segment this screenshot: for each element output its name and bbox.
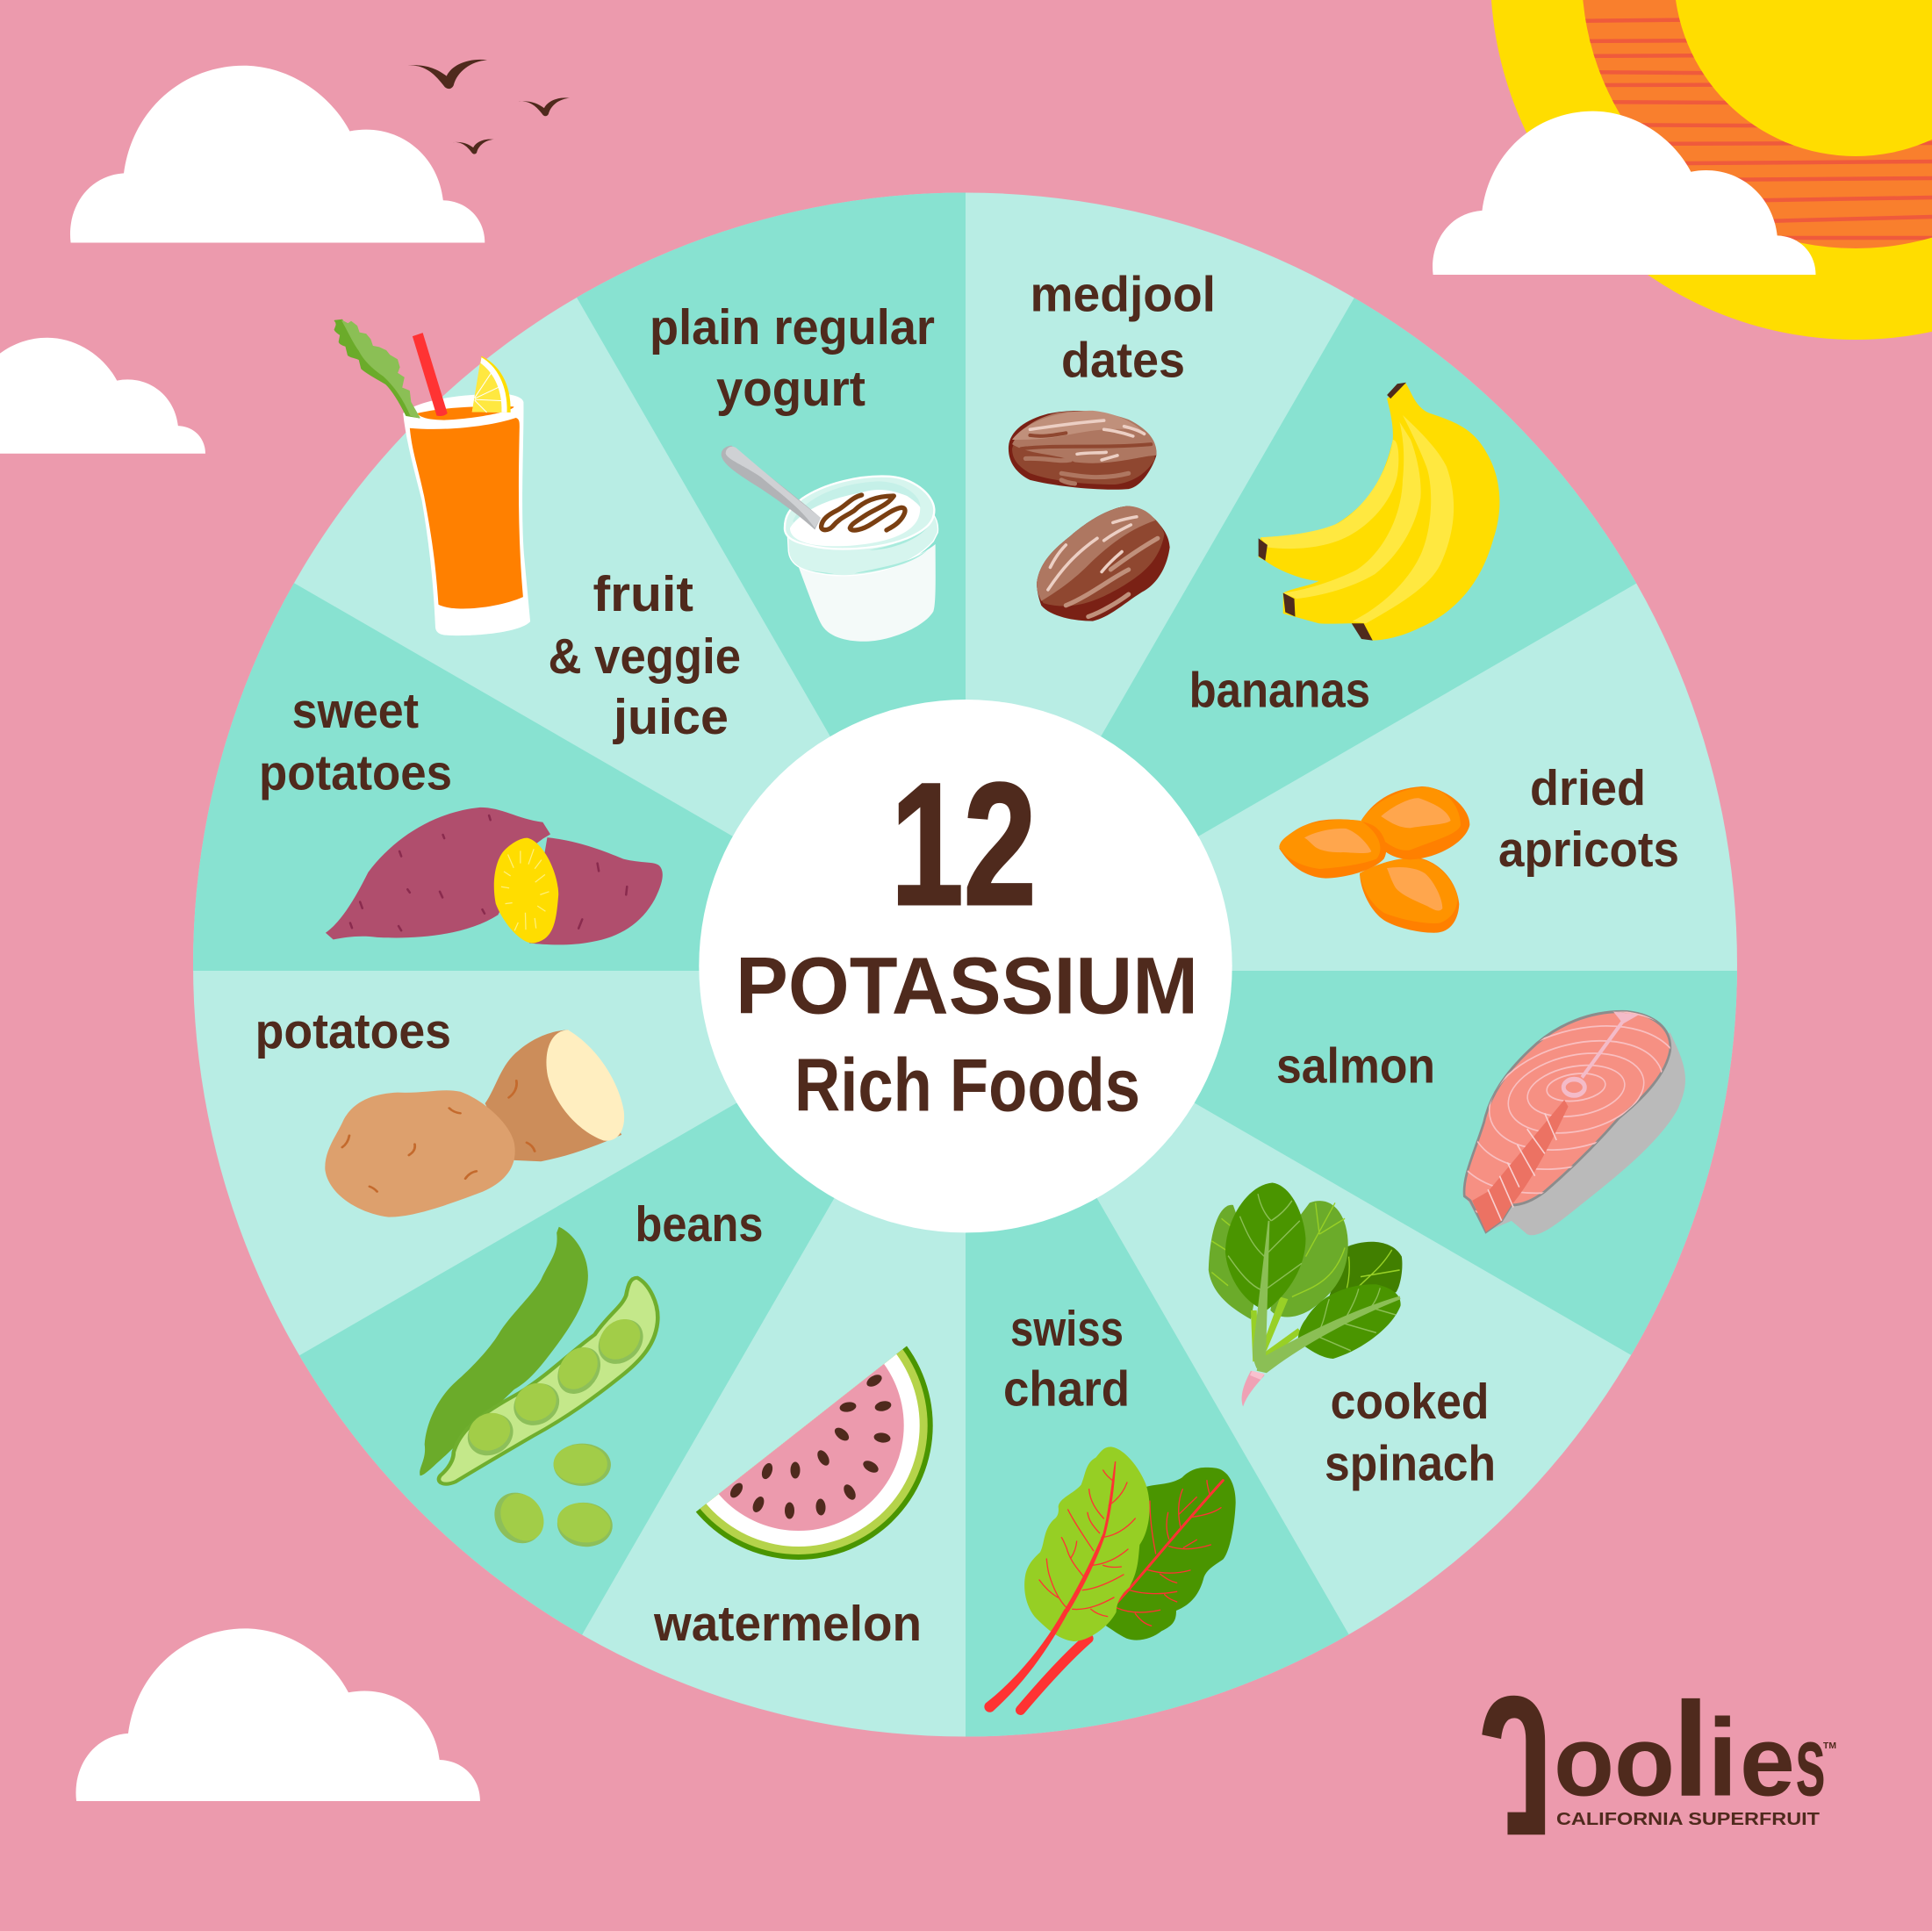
icon: swiss chard — [984, 1446, 1236, 1712]
birds — [406, 60, 570, 154]
icon: sweet potatoes — [326, 808, 663, 944]
logo: Joolies — [1480, 1655, 1836, 1878]
label: swiss chard: chard — [1003, 1361, 1130, 1418]
logo: Joolies: s — [1795, 1706, 1826, 1817]
label: sweet potatoes: potatoes — [259, 744, 452, 800]
logo: Joolies: e — [1740, 1706, 1795, 1817]
label: fruit and veggie juice: fruit — [593, 566, 693, 622]
logo tagline: CALIFORNIA SUPERFRUIT — [1556, 1810, 1820, 1829]
label: dried apricots: dried — [1530, 760, 1646, 816]
label: medjool dates: dates — [1061, 333, 1185, 389]
icon: salmon — [1462, 1009, 1685, 1236]
icon: beans — [420, 1227, 657, 1552]
label: cooked spinach — [1325, 1374, 1496, 1492]
logo: Joolies: oo — [1554, 1706, 1675, 1817]
label: bananas: bananas — [1189, 663, 1370, 719]
label: medjool dates — [1031, 267, 1216, 389]
icon: watermelon — [695, 1346, 933, 1560]
icon: potatoes — [325, 1030, 624, 1217]
logo trademark: TM — [1823, 1741, 1836, 1751]
label: cooked spinach: cooked — [1331, 1374, 1489, 1430]
title: Rich Foods: Rich Foods — [794, 1044, 1140, 1128]
label: watermelon: watermelon — [653, 1596, 922, 1652]
label: dried apricots: apricots — [1498, 822, 1679, 878]
label: fruit and veggie juice: & veggie — [548, 628, 741, 685]
food wheel — [193, 193, 1737, 1736]
cloud: left edge — [0, 338, 205, 454]
icon: spinach — [1209, 1182, 1402, 1407]
icon: bananas — [1259, 383, 1499, 641]
center circle — [699, 700, 1232, 1232]
label: potatoes: potatoes — [255, 1003, 451, 1059]
title: POTASSIUM: POTASSIUM — [736, 942, 1198, 1031]
label: plain regular yogurt: plain regular — [650, 299, 935, 355]
icon: dried apricots — [1279, 786, 1469, 933]
logo: Joolies: J — [1480, 1655, 1555, 1878]
label: swiss chard: swiss — [1010, 1301, 1124, 1357]
icon: juice glass — [334, 319, 530, 635]
cloud: top left — [70, 66, 485, 242]
icon: yogurt jar — [722, 446, 938, 642]
sun — [1490, 0, 1932, 340]
logo: Joolies: l — [1672, 1675, 1710, 1825]
title: 12: 12 — [891, 747, 1037, 941]
logo: Joolies: i — [1707, 1698, 1738, 1820]
label: medjool dates: medjool — [1031, 267, 1216, 323]
label: salmon: salmon — [1276, 1038, 1435, 1095]
label: fruit and veggie juice — [548, 566, 741, 745]
label: beans: beans — [636, 1196, 764, 1253]
icon: dates — [1009, 411, 1156, 490]
label: dried apricots — [1498, 760, 1679, 878]
label: swiss chard — [1003, 1301, 1130, 1418]
cloud: bottom left — [75, 1628, 480, 1801]
cloud: top right — [1433, 111, 1816, 275]
label: cooked spinach: spinach — [1325, 1436, 1496, 1492]
label: plain regular yogurt — [650, 299, 935, 417]
label: fruit and veggie juice: juice — [613, 689, 729, 745]
label: sweet potatoes — [259, 683, 452, 800]
icon: date two — [1037, 506, 1170, 621]
label: sweet potatoes: sweet — [292, 683, 419, 739]
label: plain regular yogurt: yogurt — [716, 361, 865, 417]
